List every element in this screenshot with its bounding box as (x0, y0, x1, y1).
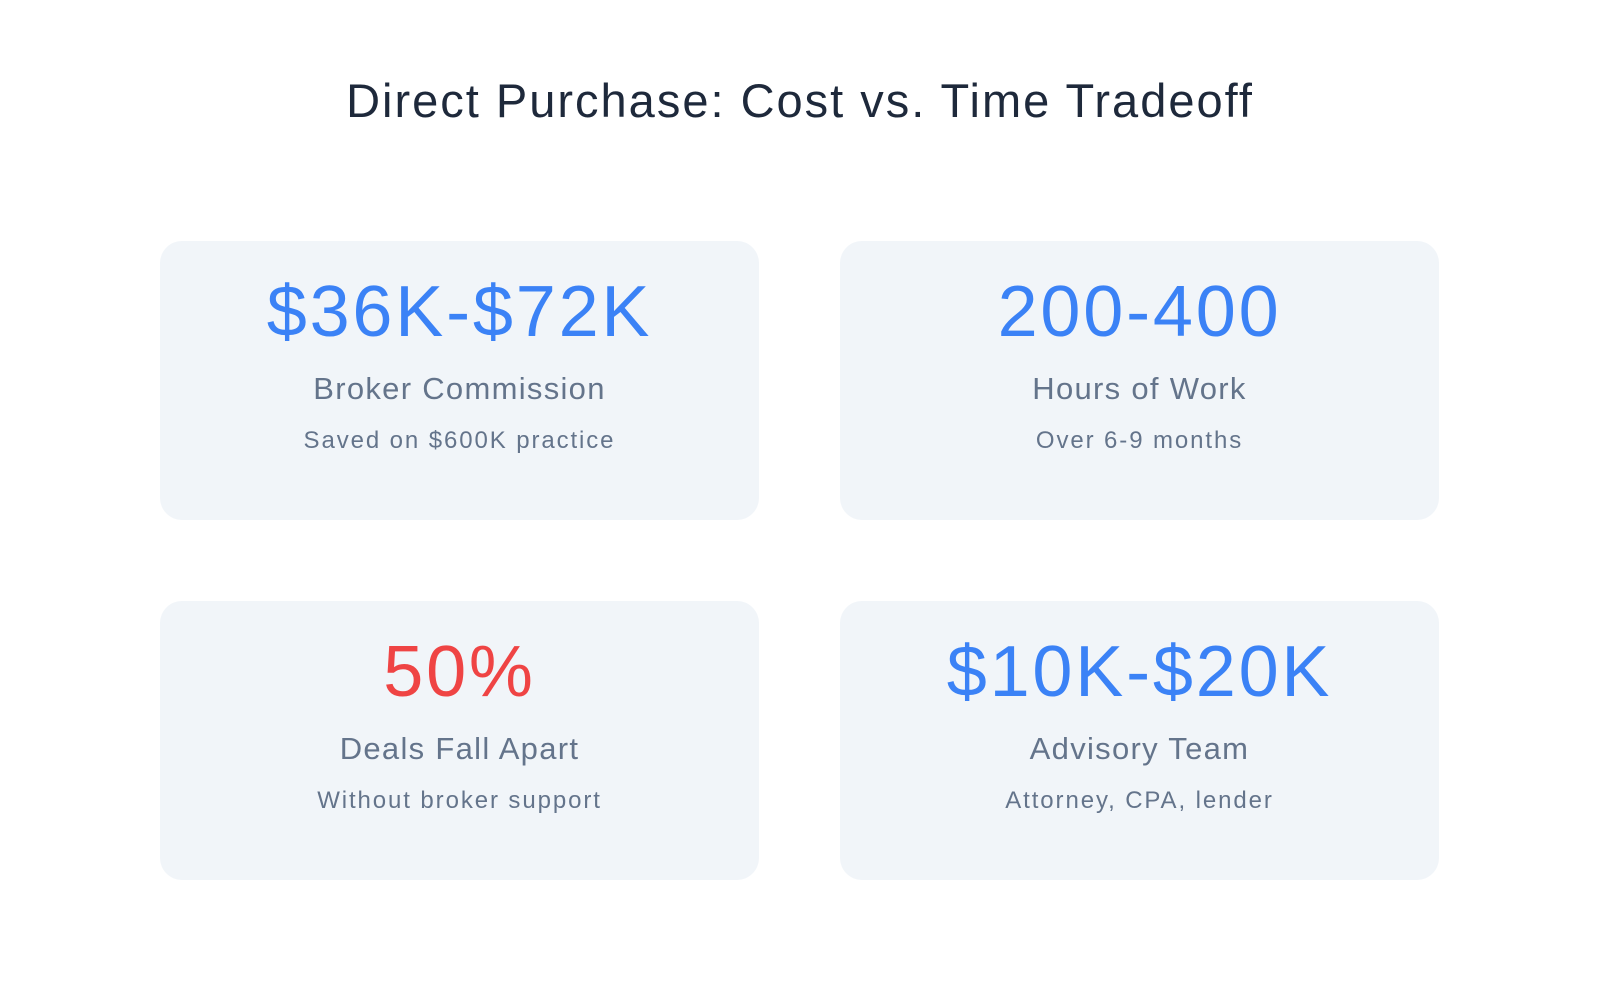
stat number: 200-400 (998, 272, 1281, 352)
panel: advisory team (840, 601, 1439, 880)
stat label: Advisory Team (1030, 731, 1249, 766)
stat note: Attorney, CPA, lender (1005, 787, 1274, 814)
stat label: Broker Commission (313, 371, 606, 406)
title: Direct Purchase: Cost vs. Time Tradeoff (346, 74, 1254, 127)
panel: hours of work (840, 241, 1439, 520)
stat label: Deals Fall Apart (340, 731, 579, 766)
stat label: Hours of Work (1032, 371, 1247, 406)
stat number: 50% (383, 632, 536, 712)
stat note: Over 6-9 months (1036, 427, 1243, 454)
stat number: $36K-$72K (267, 272, 652, 352)
panel: broker commission (160, 241, 759, 520)
stat note: Saved on $600K practice (304, 427, 615, 454)
stat note: Without broker support (317, 787, 602, 814)
panel: deals fall apart (160, 601, 759, 880)
stat number: $10K-$20K (947, 632, 1332, 712)
